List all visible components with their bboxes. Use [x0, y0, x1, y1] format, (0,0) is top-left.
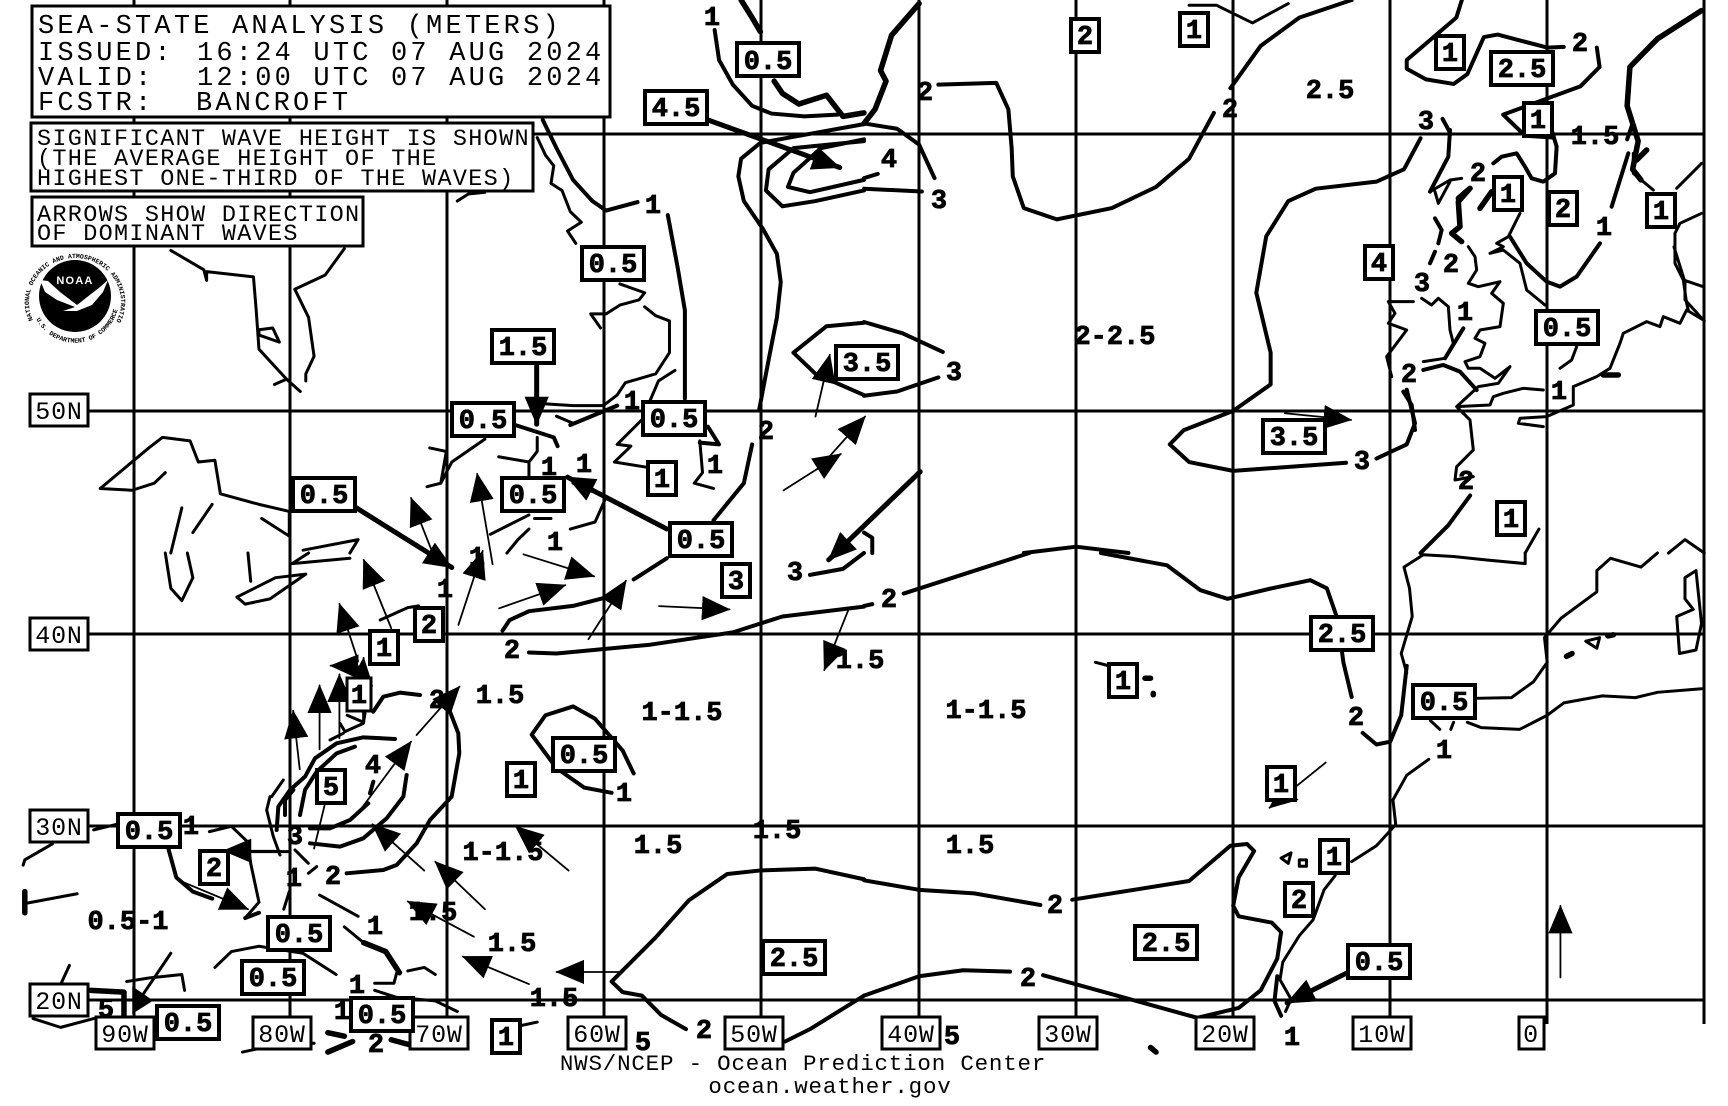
arrow: Virginia [338, 674, 340, 738]
longitude 20W: 20W [1201, 1021, 1249, 1050]
unboxed wave height values: 1 [1284, 1024, 1300, 1054]
unboxed wave height values: 2 [1348, 704, 1364, 734]
arrow: Florida west [224, 850, 281, 852]
label box 0.5: 0.5 [249, 965, 297, 995]
unboxed wave height values: 1 [1551, 378, 1567, 408]
label box 1: 1 [376, 635, 392, 665]
label box 2.5 [1311, 617, 1373, 651]
arrow: westbound at 60W [557, 971, 620, 973]
note: arrows [32, 197, 363, 248]
longitude and latitude labels [30, 394, 1544, 1050]
unboxed wave height values: 1 [437, 576, 453, 606]
label box 0.5 [1413, 685, 1475, 719]
longitude 60W: 60W [573, 1021, 621, 1050]
arrow: 70W south [435, 862, 485, 909]
unboxed wave height values: 5 [944, 1023, 960, 1053]
label box 1 [648, 462, 676, 496]
unboxed wave height values: 2 [1401, 361, 1417, 391]
label box 0.5 [268, 917, 330, 951]
label box 2: 2 [1291, 887, 1307, 917]
label box 2 [200, 851, 228, 885]
label box 2: 2 [1077, 23, 1093, 53]
unboxed wave height values: 2 [1020, 965, 1036, 995]
label box 1 [1109, 664, 1137, 698]
arrow: east of 3.5 box [1285, 413, 1351, 420]
arrow: New Jersey [339, 604, 358, 661]
label box 0.5: 0.5 [300, 482, 348, 512]
unboxed wave height values: 2 [1572, 30, 1588, 60]
arrowhead: Yucatan [132, 986, 153, 1014]
longitude 70W: 70W [415, 1021, 463, 1050]
unboxed wave height values: 1.5 [409, 899, 457, 929]
label box 0.5: 0.5 [1420, 689, 1468, 719]
label box 0.5: 0.5 [589, 251, 637, 281]
label box 2 [415, 608, 443, 642]
unboxed wave height values: 1.5 [753, 817, 801, 847]
unboxed wave height values: 1-1.5 [945, 697, 1027, 727]
unboxed wave height values: 3 [946, 359, 962, 389]
label box 1: 1 [1273, 771, 1289, 801]
label box 0.5: 0.5 [1355, 949, 1403, 979]
unboxed wave height values: 2 [429, 687, 445, 717]
NOAA logo: NOAA [56, 275, 94, 287]
label box 1 near 60W: 1 [498, 1024, 514, 1054]
note: arrows: OF DOMINANT WAVES [37, 221, 299, 248]
unboxed wave height values: 3 [1418, 108, 1434, 138]
unboxed wave height values: 1 [624, 388, 640, 418]
label box 0.5: 0.5 [1543, 315, 1591, 345]
label box 0.5 [737, 43, 799, 78]
label box 2.5: 2.5 [1142, 930, 1190, 960]
label box 2 [1285, 883, 1313, 917]
note: significant wave height: (THE AVERAGE HEIGHT OF THE [37, 146, 437, 173]
arrow: 1-1.5 [516, 826, 569, 871]
label box 1 [370, 631, 398, 665]
unboxed wave height values: 1 [367, 913, 383, 943]
unboxed wave height values: 2 [758, 418, 774, 448]
title block: 16:24 UTC 07 AUG 2024 [197, 39, 604, 69]
label box 2 [1549, 192, 1577, 226]
unboxed wave height values: 1 [576, 451, 592, 481]
label box 4.5 [645, 91, 707, 125]
unboxed wave height values: 2 [1470, 160, 1486, 190]
arrow: heavy 0.5 Nova Scotia [568, 477, 667, 529]
unboxed wave height values: 2 [917, 79, 933, 109]
arrow: off Nova Scotia [523, 554, 594, 576]
arrow: hurricane swell [360, 742, 411, 810]
label box 0.5 [118, 814, 180, 848]
arrow: mid-Atlantic west [784, 454, 841, 490]
label box 0.5 [582, 247, 644, 281]
arrow: heavy 0.5 Africa [1287, 973, 1347, 1003]
label box 0.5 [293, 478, 355, 512]
label box 1: 1 [1186, 17, 1202, 47]
NOAA logo: U.S. DEPARTMENT OF COMMERCE [36, 308, 118, 343]
label box 0.5 over 70W [351, 998, 413, 1032]
label box 0.5: 0.5 [560, 742, 608, 772]
longitude 0: 0 [1523, 1021, 1539, 1050]
unboxed wave height values: 2 [1458, 468, 1474, 498]
unboxed wave height values: 2 [1047, 892, 1063, 922]
title block: FCSTR: [38, 89, 154, 119]
unboxed wave height values: 1.5 [836, 647, 884, 677]
unboxed wave height values: 1 [1457, 299, 1473, 329]
arrow: 3.5 ring north [815, 355, 830, 417]
unboxed wave height values: 2 [1443, 251, 1459, 281]
label box 2: 2 [206, 855, 222, 885]
unboxed wave height values: 1.5 [946, 832, 994, 862]
coastlines: northwest quadrant [100, 0, 864, 553]
label box 2.5 [763, 941, 825, 975]
arrow: mid-Atlantic [819, 417, 865, 468]
label box 2.5: 2.5 [1318, 621, 1366, 651]
label box 0.5 [242, 961, 304, 995]
arrow: 1.5 south-west [824, 609, 849, 670]
label box 3: 3 [728, 568, 744, 598]
coastlines: southeast quadrant [1095, 553, 1702, 1052]
coastlines: British Isles and North Sea [1387, 150, 1703, 480]
longitude 0 [1519, 1017, 1544, 1050]
arrow: north-pointing near 0 [1559, 906, 1561, 977]
wave height contours: Gulf Stream off the US southeast [250, 693, 459, 873]
longitude 50W: 50W [730, 1021, 778, 1050]
label box 2.5: 2.5 [1498, 56, 1546, 86]
note: significant wave height: SIGNIFICANT WAVE HEIGHT IS SHOWN [37, 126, 530, 153]
label box 4: 4 [1371, 250, 1387, 280]
arrow: heavy 1.5 [534, 366, 539, 424]
latitude 20N: 20N [35, 988, 83, 1017]
footer credit: ocean.weather.gov [708, 1074, 952, 1100]
latitude 40N: 40N [35, 622, 83, 651]
unboxed wave height values: 1 [547, 529, 563, 559]
arrow: Cape Cod [364, 560, 391, 628]
arrow: heavy 3.5 [829, 472, 920, 560]
unboxed wave height values: 2 [881, 586, 897, 616]
arrow: Gulf of Mexico [24, 894, 77, 904]
label box 0.5: 0.5 [509, 482, 557, 512]
label box 5: 5 [323, 774, 339, 804]
arrow: left-pointing Delaware [331, 666, 364, 667]
label box 0.5: 0.5 [677, 527, 725, 557]
unboxed wave height values: 1 [286, 865, 302, 895]
label box 2.5 [1135, 926, 1197, 960]
title block: BANCROFT [196, 89, 351, 119]
label box 0.5: 0.5 [459, 407, 507, 437]
unboxed wave height values: 1.5 [476, 682, 524, 712]
label box 4 [1365, 246, 1393, 280]
unboxed wave height values: 2 [696, 1017, 712, 1047]
footer credit: NWS/NCEP - Ocean Prediction Center [560, 1051, 1046, 1077]
label box 1 [1267, 767, 1295, 801]
label box 1: 1 [654, 466, 670, 496]
longitude 40W: 40W [887, 1021, 935, 1050]
unboxed wave height values: 0.5-1 [87, 908, 169, 938]
unboxed wave height values: 1.5 [634, 832, 682, 862]
unboxed wave height values: 2 [504, 637, 520, 667]
unboxed wave height values: 4 [881, 146, 897, 176]
longitude 10W: 10W [1358, 1021, 1406, 1050]
label box 0.5: 0.5 [650, 406, 698, 436]
label box 3.5: 3.5 [1270, 424, 1318, 454]
unboxed wave height values: 3 [287, 823, 303, 853]
label box 3 [722, 564, 750, 598]
title block: SEA-STATE ANALYSIS (METERS) [38, 12, 562, 42]
label box 0.5: 0.5 [275, 921, 323, 951]
coastlines: southwest quadrant [23, 553, 537, 1052]
unboxed wave height values: 1 [1436, 737, 1452, 767]
unboxed wave height values: 1.5 [1571, 123, 1619, 153]
wave height contours: southwest quadrant [168, 553, 864, 1041]
unboxed wave height values: 1-1.5 [641, 699, 723, 729]
unboxed wave height values: 1 [645, 192, 661, 222]
label box 1: 1 [1653, 198, 1669, 228]
arrow: off Carolinas [417, 687, 460, 735]
unboxed wave height values: 2.5 [1306, 77, 1354, 107]
unboxed wave height values: 1 [616, 780, 632, 810]
arrow: Yucatan [141, 953, 171, 997]
label box 0.5 [553, 738, 615, 772]
label box 3.5 [836, 346, 898, 380]
label box 1 [1320, 840, 1348, 874]
label box 1 [1180, 13, 1208, 47]
NOAA logo [24, 254, 126, 343]
label box 0.5 [1348, 945, 1410, 979]
label box 0.5 over 90W: 0.5 [164, 1010, 212, 1040]
unboxed wave height values: 1 [334, 998, 350, 1028]
title block [32, 6, 610, 119]
label box 0.5: 0.5 [744, 48, 792, 78]
label box 1 [1524, 103, 1552, 137]
unboxed wave height values: 1 [541, 454, 557, 484]
wave height contours: northwest quadrant [515, 30, 864, 520]
longitude 80W: 80W [258, 1021, 306, 1050]
arrow: south of 30N [372, 824, 424, 871]
label box 1 [1494, 177, 1522, 211]
unboxed wave height values: 1 [183, 813, 199, 843]
unboxed wave height values: 3 [1414, 270, 1430, 300]
label box 2: 2 [421, 612, 437, 642]
label box 1.5 [492, 330, 554, 364]
title block: 12:00 UTC 07 AUG 2024 [197, 64, 604, 94]
arrow: Nova Scotia [477, 474, 493, 564]
arrow: Canary region [1270, 763, 1326, 808]
unboxed wave height values: 5 [635, 1029, 651, 1059]
label box 1: 1 [1442, 40, 1458, 70]
unboxed wave height values: 1-1.5 [462, 839, 544, 869]
arrow: Bahamas [408, 901, 474, 937]
title block: ISSUED: [38, 39, 174, 69]
unboxed wave height values: 5 [98, 996, 114, 1026]
arrow: Gulf of Maine [458, 551, 483, 625]
unboxed wave height values: 1.5 [530, 985, 578, 1015]
label box 1: 1 [1503, 506, 1519, 536]
label box 1 [1497, 502, 1525, 536]
arrow: east-bound [659, 606, 730, 609]
arrow: 1.5 west-north-west [463, 957, 529, 984]
label box 0.5 [452, 403, 514, 437]
label box 0.5 [1536, 311, 1598, 345]
arrow: Carolina coast 2 [319, 685, 321, 749]
arrow: off New England [499, 585, 565, 608]
arrow: Bay of Campeche [57, 965, 69, 992]
label box 1: 1 [1500, 181, 1516, 211]
title block: VALID: [38, 64, 154, 94]
unboxed wave height values: 2-2.5 [1074, 323, 1156, 353]
arrow: Florida offshore [314, 771, 333, 849]
label box 4.5: 4.5 [652, 95, 700, 125]
unboxed wave height values: 1 [707, 452, 723, 482]
unboxed wave height values: 2 [1222, 96, 1238, 126]
label box 0.5 over 70W: 0.5 [358, 1002, 406, 1032]
label box 1: 1 [351, 682, 367, 712]
label box 3.5 [1263, 420, 1325, 454]
unboxed wave height values: 1.5 [488, 930, 536, 960]
wave height contours: southeast quadrant [864, 553, 1407, 1018]
coastlines: northeast quadrant [864, 4, 1704, 553]
footer credit [560, 1051, 1046, 1100]
arrow: heavy 0.5 Great Lakes [355, 507, 452, 568]
wave height contours: northeast quadrant [864, 0, 1633, 553]
label box 0.5: 0.5 [125, 818, 173, 848]
label box 2.5: 2.5 [770, 945, 818, 975]
note: arrows: ARROWS SHOW DIRECTION [37, 202, 360, 229]
note: significant wave height [31, 123, 533, 193]
unboxed wave height values: 3 [931, 187, 947, 217]
label box 0.5 [670, 523, 732, 557]
label box 2 [1071, 19, 1099, 53]
unboxed wave height values: 1 [469, 544, 485, 574]
label box 1: 1 [1530, 107, 1546, 137]
label box 1.5: 1.5 [499, 334, 547, 364]
unboxed wave height values: 2 [325, 863, 341, 893]
label box 0.5 [643, 402, 705, 436]
label box 5 [317, 770, 345, 804]
unboxed wave height values: 1 [704, 4, 720, 34]
label box 0.5 over 90W [157, 1006, 219, 1040]
note: significant wave height: HIGHEST ONE-THIRD OF THE WAVES) [37, 166, 514, 193]
label box 2: 2 [1555, 196, 1571, 226]
arrow: Maine [411, 498, 435, 560]
arrow: eastern Gulf [182, 882, 248, 909]
unboxed wave height values: 3 [787, 559, 803, 589]
unboxed wave height values: 2 [368, 1031, 384, 1061]
longitude 30W: 30W [1044, 1021, 1092, 1050]
arrow: 50W [588, 581, 626, 639]
unboxed wave height values: 1 [1596, 214, 1612, 244]
label box 1 [347, 678, 371, 712]
unboxed wave height values: 4 [365, 752, 381, 782]
label box 1 [1436, 36, 1464, 70]
wave direction arrows [24, 119, 1560, 1014]
label box 1 [507, 763, 535, 797]
label box 1 [1647, 194, 1675, 228]
unboxed wave height values: 3 [1354, 448, 1370, 478]
label box 2.5 [1491, 52, 1553, 86]
label box 0.5 [502, 478, 564, 512]
label box 1: 1 [1326, 844, 1342, 874]
label box 3.5: 3.5 [843, 350, 891, 380]
latitude 50N: 50N [35, 398, 83, 427]
arrow: Delaware [359, 658, 364, 705]
latitude 30N: 30N [35, 814, 83, 843]
label box 1: 1 [513, 767, 529, 797]
wave height contours: British Isles [1403, 130, 1628, 430]
label box 1 near 60W [492, 1020, 520, 1054]
unboxed wave height values: 1 [349, 972, 365, 1002]
arrow: heavy 4.5 [705, 119, 840, 168]
label box 1: 1 [1115, 668, 1131, 698]
arrow: Carolina coast [293, 711, 300, 769]
longitude 90W: 90W [101, 1021, 149, 1050]
